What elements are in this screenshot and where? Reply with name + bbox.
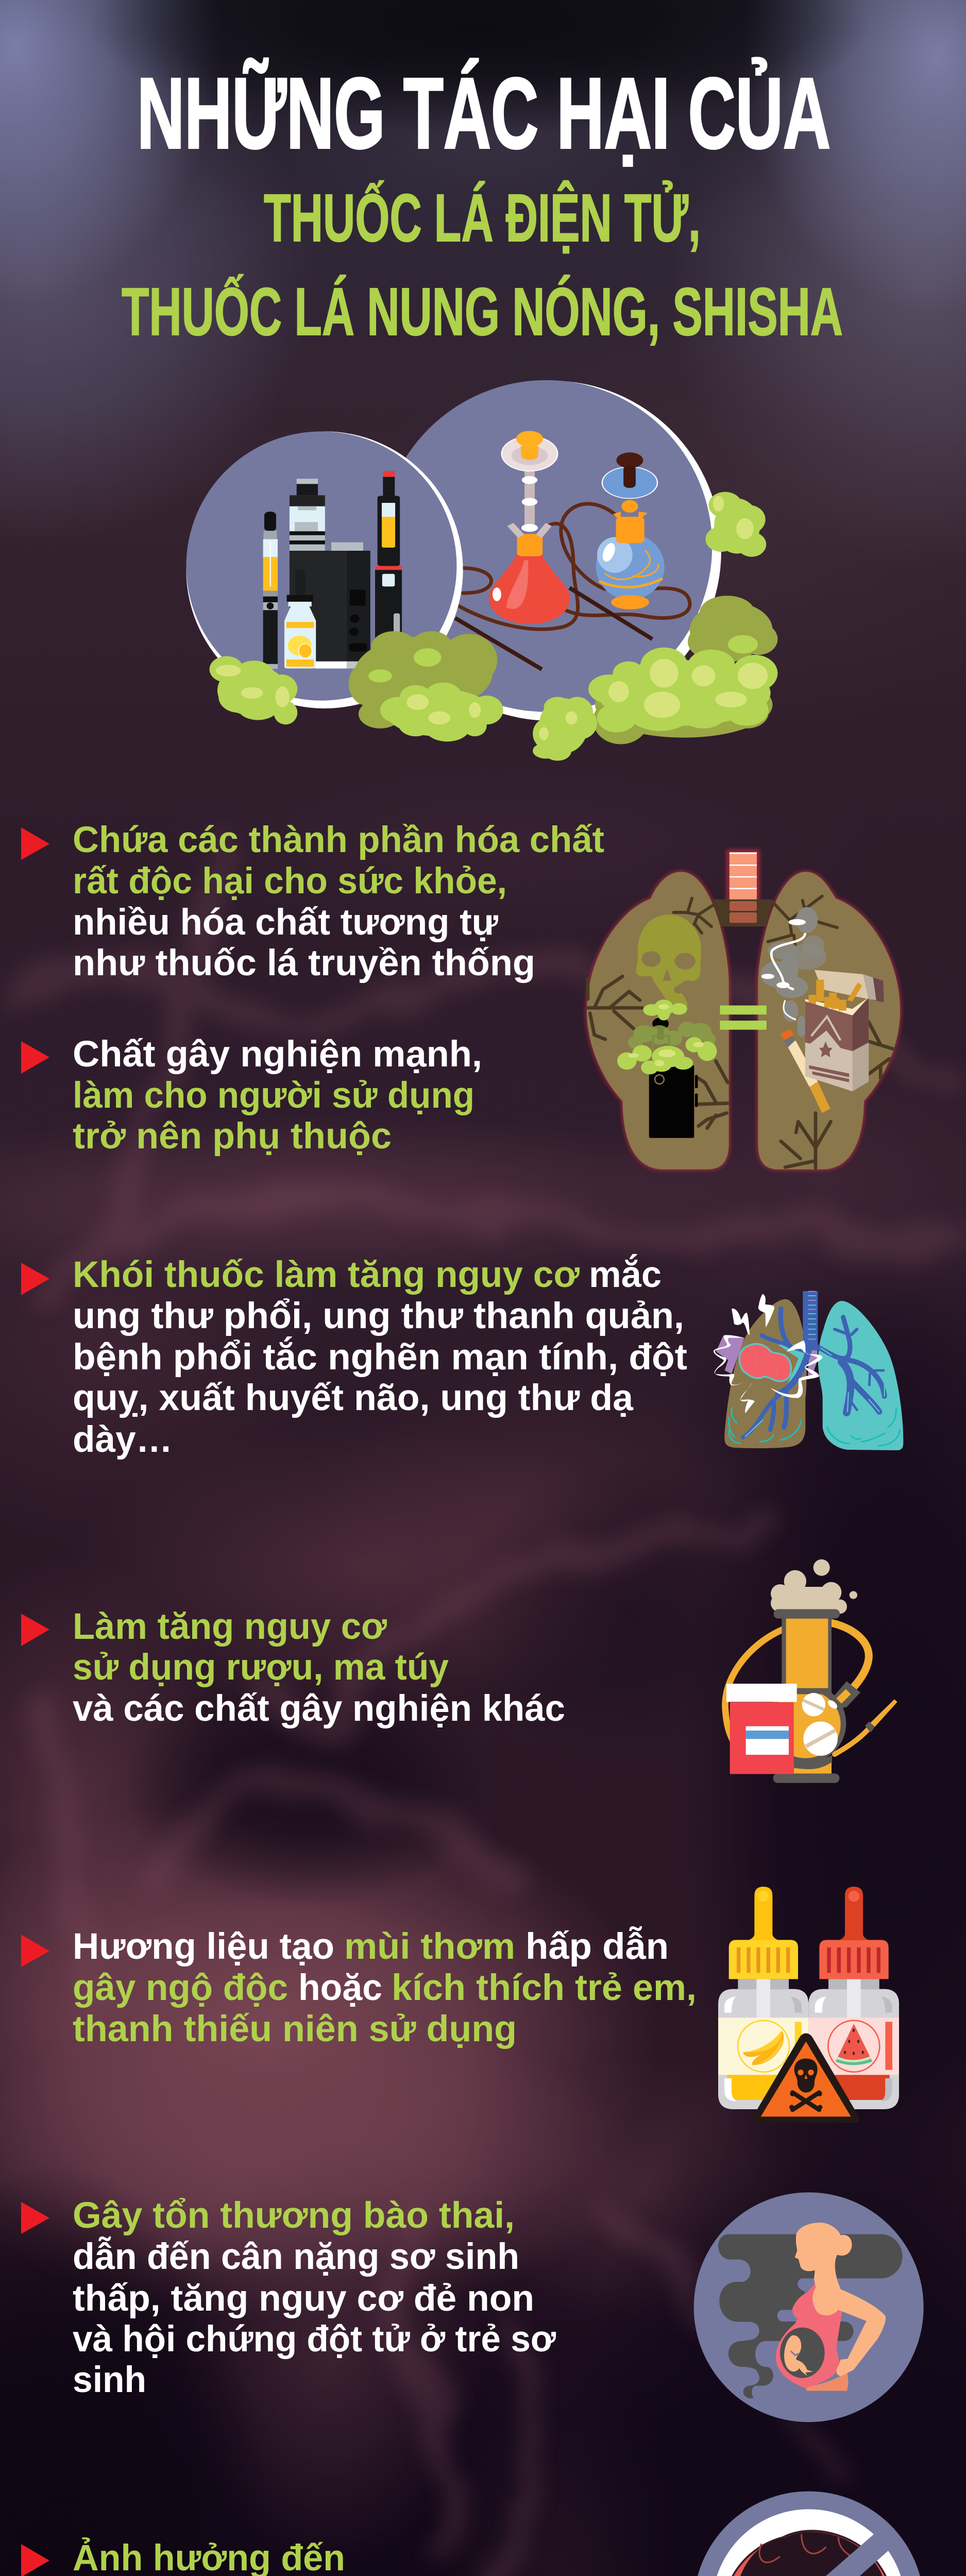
bullet 6: fetal harm: và hội chứng đột tử ở trẻ sơ xyxy=(73,2319,556,2360)
bullet 3: cancer risk: ung thư phổi, ung thư thanh quản, xyxy=(73,1296,684,1336)
bullet 3: cancer risk: quỵ, xuất huyết não, ung thư dạ xyxy=(73,1378,634,1418)
icon: lungs with vape and cigarettes xyxy=(587,851,900,1170)
toxic skull xyxy=(636,914,701,1007)
bullet 6: fetal harm: thấp, tăng nguy cơ đẻ non xyxy=(73,2278,534,2319)
bullet 1: chemicals: rất độc hại cho sức khỏe, xyxy=(73,861,507,902)
bullet 2: addiction: Chất gây nghiện mạnh, xyxy=(73,1034,482,1075)
icon: diseased lungs xyxy=(714,1291,903,1450)
icon: bong with pills xyxy=(725,1560,897,1783)
box mod xyxy=(290,479,370,669)
equals sign xyxy=(720,1006,767,1030)
thin pen xyxy=(263,512,278,669)
bullet 3: cancer risk: Khói thuốc làm tăng nguy cơ xyxy=(73,1255,580,1295)
bullet 5: flavourings: hoặc xyxy=(298,1968,382,2008)
bullet 5: flavourings: kích thích trẻ em, xyxy=(392,1968,697,2008)
warning triangle xyxy=(753,2033,859,2123)
bullet 2: addiction: làm cho người sử dụng xyxy=(73,1075,474,1116)
bullet 5: flavourings: mùi thơm xyxy=(344,1926,515,1967)
bullet 6: fetal harm xyxy=(21,2195,556,2400)
hero illustration: e-cigarettes and shisha in circles with smoke xyxy=(186,380,777,761)
bullet 7: brain development xyxy=(21,2538,541,2576)
bullet 3: cancer risk: dày… xyxy=(73,1419,173,1460)
yellow bottle xyxy=(718,1887,808,2109)
vape device xyxy=(617,999,717,1138)
cigarette xyxy=(781,1029,831,1113)
cigarette smoke xyxy=(760,907,826,1037)
bullet 5: flavourings: thanh thiếu niên sử dụng xyxy=(73,2009,517,2049)
bullet 4: other substances: và các chất gây nghiện khác xyxy=(73,1688,565,1729)
smoke wisps xyxy=(10,835,953,2576)
bullet 5: flavourings: gây ngộ độc xyxy=(73,1968,288,2008)
bullet 6: fetal harm: sinh xyxy=(73,2360,146,2400)
icon: flavoured e-liquid bottles with poison sign xyxy=(718,1887,899,2123)
bullet 4: other substances xyxy=(21,1606,565,1729)
bullet 3: cancer risk: bệnh phổi tắc nghẽn mạn tính, đột xyxy=(73,1337,687,1378)
bullet 4: other substances: Làm tăng nguy cơ xyxy=(73,1606,387,1647)
bullet 3: cancer risk xyxy=(21,1255,687,1460)
dropper bottle xyxy=(284,569,316,669)
bullet 6: fetal harm: dẫn đến cân nặng sơ sinh xyxy=(73,2236,519,2277)
bullet 4: other substances: sử dụng rượu, ma túy xyxy=(73,1647,449,1688)
bullet 5: flavourings: Hương liệu tạo xyxy=(73,1926,334,1967)
bullet 1: chemicals: như thuốc lá truyền thống xyxy=(73,943,535,984)
bullet 2: addiction xyxy=(21,1034,482,1157)
cigarette pack xyxy=(805,970,884,1091)
bullet 2: addiction: trở nên phụ thuộc xyxy=(73,1116,392,1157)
bullet 6: fetal harm: Gây tổn thương bào thai, xyxy=(73,2195,515,2236)
tall pen xyxy=(375,471,402,642)
smoke clouds xyxy=(705,492,766,557)
bullet 5: flavourings: hấp dẫn xyxy=(526,1926,669,1967)
bullet 5: flavourings xyxy=(21,1926,697,2049)
title xyxy=(122,57,843,349)
bullet 3: cancer risk: mắc xyxy=(589,1255,662,1295)
bullet 1: chemicals: Chứa các thành phần hóa chất xyxy=(73,820,604,860)
bullet 1: chemicals xyxy=(21,820,604,984)
red bottle xyxy=(808,1887,899,2109)
icon: prohibited brain xyxy=(693,2492,924,2576)
title: THUỐC LÁ ĐIỆN TỬ, xyxy=(264,180,701,256)
bullet 1: chemicals: nhiều hóa chất tương tự xyxy=(73,902,499,943)
icon: pregnant woman and smoke xyxy=(694,2192,924,2422)
dead-tree bronchi xyxy=(588,896,894,1168)
